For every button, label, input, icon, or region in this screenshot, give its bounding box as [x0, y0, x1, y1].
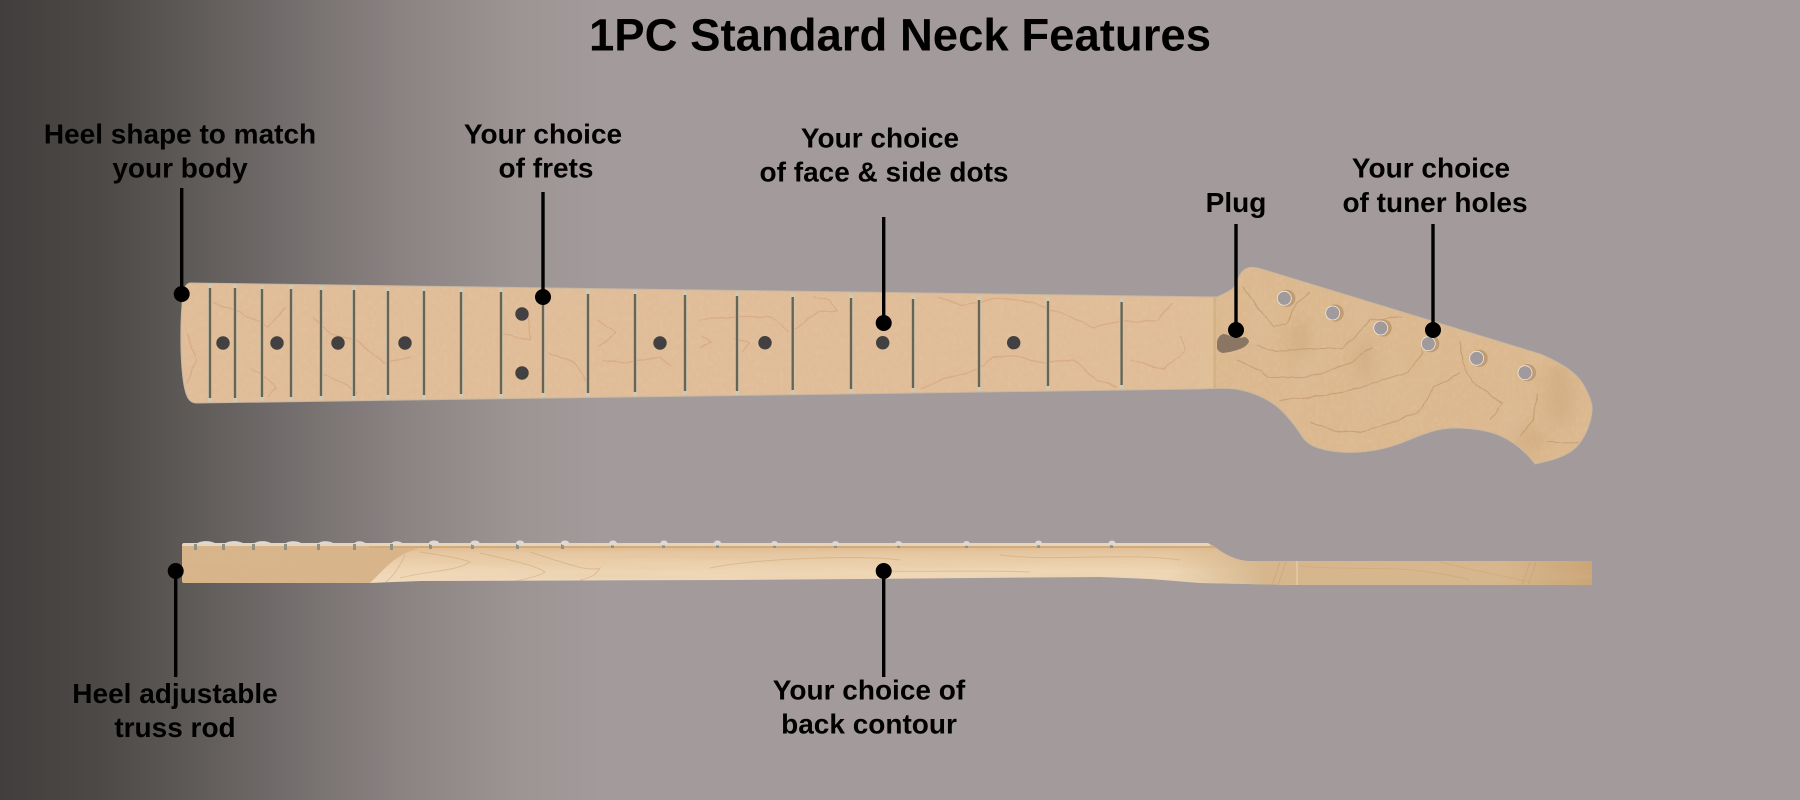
callout: plug: [1206, 187, 1266, 338]
callout: face and side dots: of face & side dots: [760, 156, 1008, 188]
maple face wood: [175, 260, 1600, 470]
title: 1PC Standard Neck Features: [589, 10, 1211, 60]
tuner holes: [1277, 290, 1536, 381]
callout: back contour: back contour: [781, 708, 957, 740]
headstock dark figure patches: [1294, 330, 1572, 448]
callout: tuner holes: of tuner holes: [1342, 187, 1528, 218]
neck side view: [182, 540, 1592, 585]
callout: back contour: Your choice of: [773, 674, 966, 706]
callout: heel shape: [44, 118, 316, 302]
side wood: [182, 543, 1592, 585]
plug: [1217, 334, 1249, 353]
callout: plug: Plug: [1206, 187, 1266, 218]
callout: truss rod: [72, 563, 278, 743]
callout: face and side dots: Your choice: [801, 122, 959, 154]
fret tangs: [194, 544, 1113, 550]
callout: heel shape: Heel shape to match: [44, 118, 316, 150]
headstock grain lines: [1237, 287, 1578, 443]
callout: heel shape: your body: [112, 152, 248, 184]
callout: back contour: [773, 563, 966, 740]
callout: face and side dots: [760, 122, 1008, 331]
callout: tuner holes: Your choice: [1352, 152, 1510, 184]
callout: truss rod: truss rod: [114, 712, 236, 743]
face dots: [216, 307, 1020, 380]
callout: frets: Your choice: [464, 118, 622, 150]
callout: tuner holes: [1342, 152, 1528, 338]
fretboard grain lines: [187, 297, 1185, 397]
outline edge: [181, 267, 1592, 464]
callout: truss rod: Heel adjustable: [72, 678, 278, 709]
callout: frets: [464, 118, 622, 305]
fret crowns: [196, 540, 1115, 546]
neck to headstock band: [1200, 298, 1213, 360]
callout: frets: of frets: [499, 152, 593, 184]
neck face view: [175, 260, 1600, 470]
frets: [210, 284, 1122, 402]
